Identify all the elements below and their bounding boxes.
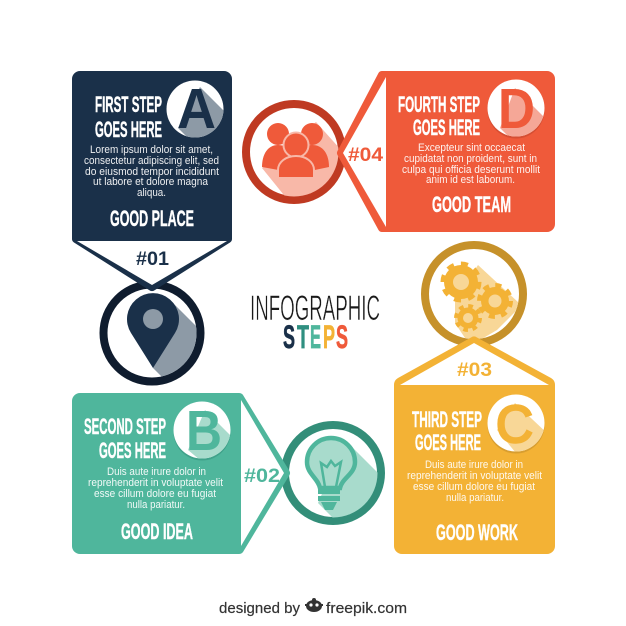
heading (95, 92, 162, 142)
step number: #04 (348, 145, 383, 166)
body text: aliqua. (137, 187, 166, 199)
step number: #02 (244, 466, 280, 487)
heading (84, 414, 166, 463)
card shape (394, 336, 555, 554)
body text (84, 144, 219, 199)
icon: map pin in ring (100, 282, 204, 386)
letter badge C: C (496, 396, 533, 454)
footer credit (219, 598, 407, 617)
label: GOOD PLACE (110, 206, 194, 231)
body text (407, 459, 542, 504)
step number: #03 (457, 360, 492, 381)
body text: culpa qui officia deserunt mollit (402, 164, 540, 176)
footer credit: designed by (219, 600, 300, 617)
footer credit: freepik.com (326, 600, 407, 617)
letter badge D: D (498, 77, 535, 141)
heading (412, 407, 482, 455)
icon: light bulb in ring (285, 425, 395, 530)
body text: Excepteur sint occaecat (418, 142, 525, 154)
body text: cupidatat non proident, sunt in (404, 153, 537, 165)
letter badge C (488, 394, 544, 454)
body text: consectetur adipiscing elit, sed (84, 155, 219, 167)
heading: THIRD STEP (412, 407, 482, 432)
heading: GOES HERE (413, 115, 480, 140)
icon: gears in ring (425, 245, 523, 343)
body text: Duis aute irure dolor in (425, 459, 523, 471)
title: INFOGRAPHIC (250, 289, 380, 328)
card shape (72, 393, 290, 554)
card shape (337, 71, 555, 232)
heading (398, 92, 480, 140)
body text: anim id est laborum. (426, 174, 515, 186)
title (250, 289, 380, 355)
icon: team in ring (246, 104, 350, 215)
heading: FIRST STEP (95, 92, 162, 117)
letter badge A: A (177, 77, 216, 141)
body text (88, 466, 223, 511)
title: P (323, 319, 335, 355)
body text: nulla pariatur. (127, 499, 185, 511)
step number: #01 (136, 249, 169, 270)
body text: do eiusmod tempor incididunt (85, 166, 219, 178)
body text: ut labore et dolore magna (93, 176, 209, 188)
panel: third step (394, 245, 565, 554)
heading: FOURTH STEP (398, 92, 480, 117)
body text (402, 142, 540, 186)
letter badge B (174, 402, 230, 460)
letter badge A (166, 80, 224, 138)
title: S (336, 319, 348, 355)
letter badge D (488, 80, 544, 138)
title: S (283, 319, 295, 355)
title: T (297, 319, 309, 355)
label: GOOD WORK (436, 520, 518, 545)
infographic (72, 71, 555, 616)
label: GOOD IDEA (121, 519, 193, 544)
icon: freepik logo (305, 598, 323, 612)
panel: second step (72, 393, 395, 554)
label: GOOD TEAM (432, 192, 511, 217)
body text: esse cillum dolore eu fugiat (413, 481, 535, 493)
body text: Duis aute irure dolor in (107, 466, 206, 478)
body text: esse cillum dolore eu fugiat (94, 488, 216, 500)
heading: SECOND STEP (84, 414, 166, 439)
heading: GOES HERE (95, 117, 162, 142)
body text: nulla pariatur. (446, 492, 504, 504)
heading: GOES HERE (415, 430, 481, 455)
body text: Lorem ipsum dolor sit amet, (90, 144, 213, 156)
heading: GOES HERE (99, 438, 166, 463)
body text: reprehenderit in voluptate velit (88, 477, 223, 489)
body text: reprehenderit in voluptate velit (407, 470, 542, 482)
letter badge B: B (186, 399, 222, 463)
title: E (310, 319, 321, 355)
panel: fourth step (246, 71, 565, 232)
panel: first step (72, 71, 232, 386)
card shape (72, 71, 232, 291)
